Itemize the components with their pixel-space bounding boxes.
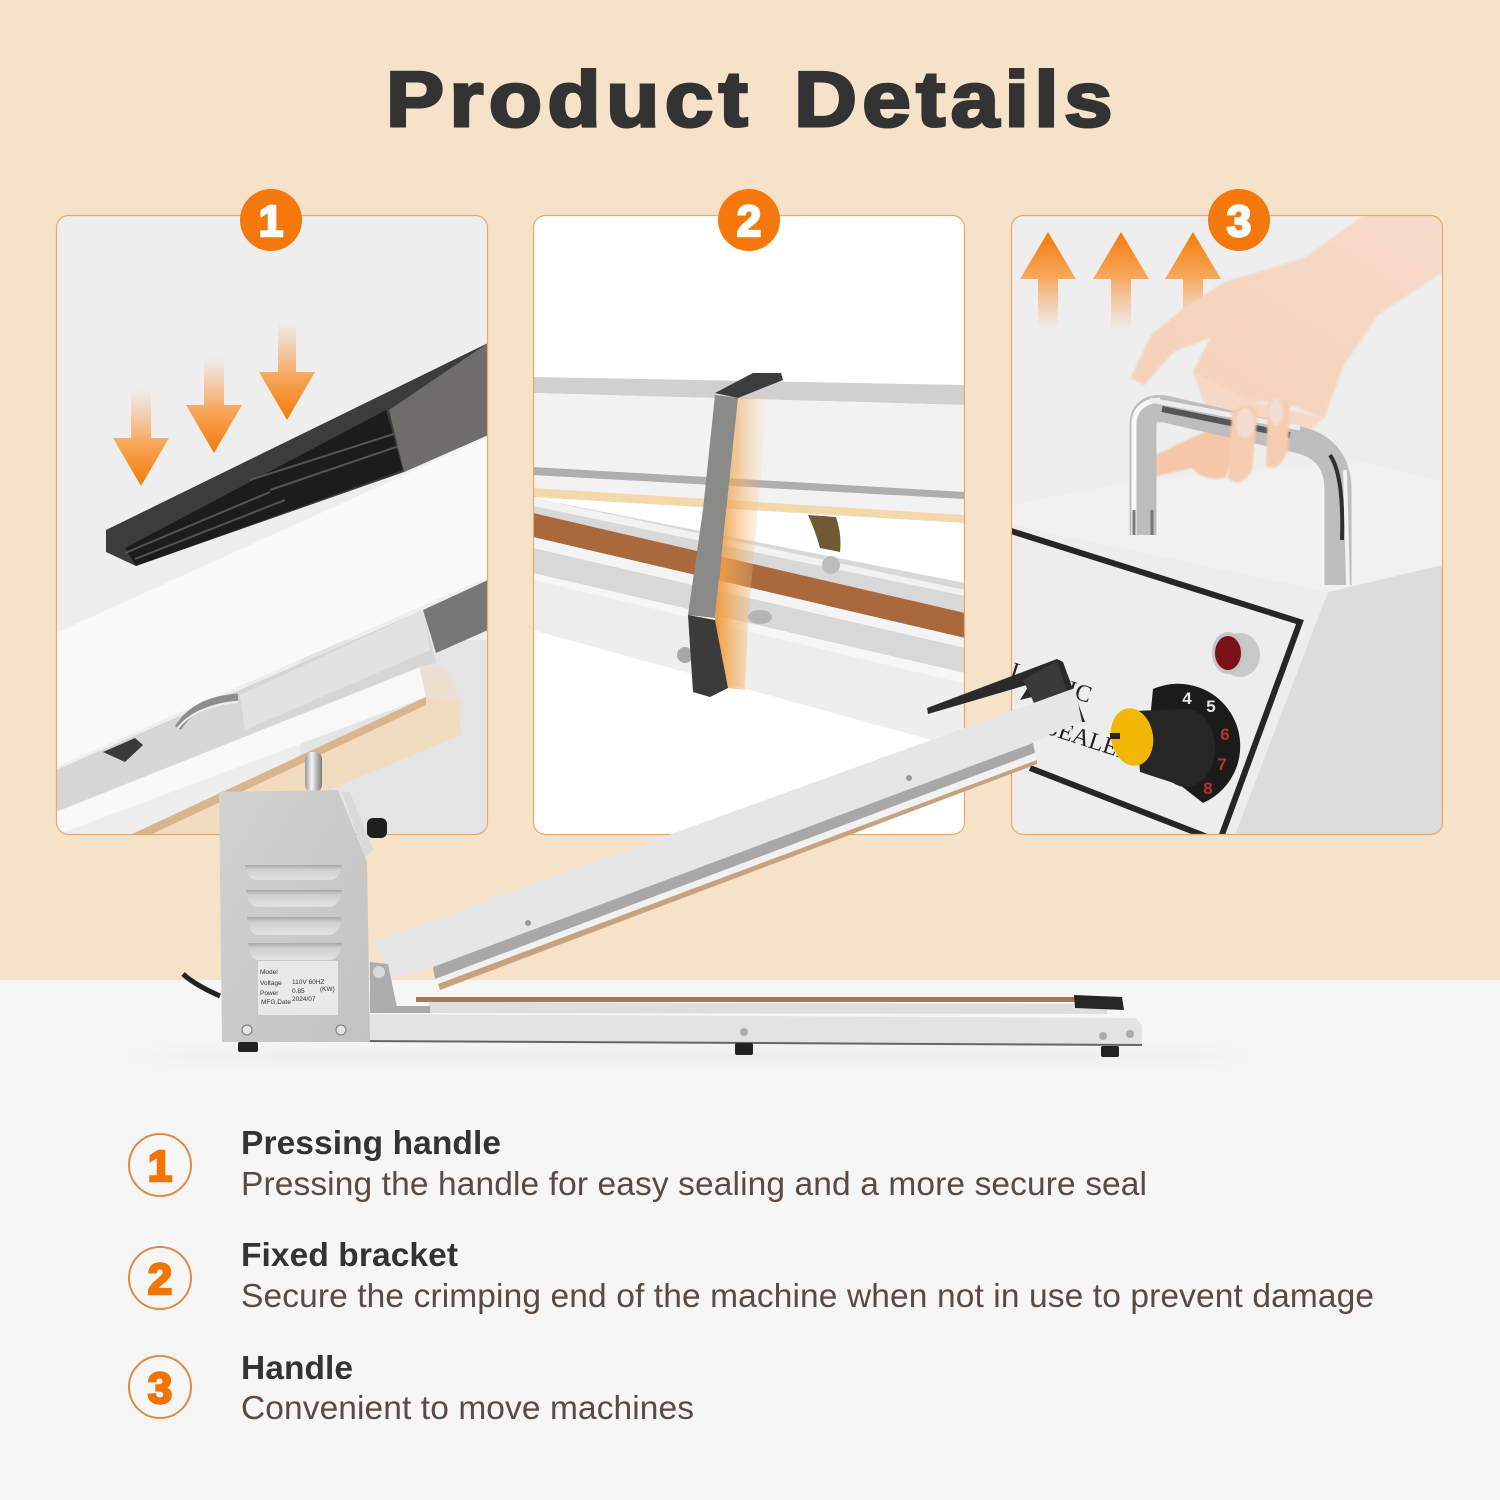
panel 3: carry handle photo: SEALER — [1042, 714, 1136, 767]
dark handle grip — [106, 343, 488, 566]
dial — [1106, 684, 1240, 803]
badge 2: 2 — [737, 197, 761, 246]
body — [219, 790, 370, 1042]
item 2: fixed bracket — [129, 1237, 1374, 1315]
dial: 6 — [1220, 725, 1230, 744]
panel 3: carry handle photo — [994, 215, 1443, 840]
base rail: front — [368, 1014, 1142, 1046]
item 3 description: Convenient to move machines — [241, 1390, 694, 1427]
background: cream upper band — [0, 0, 1500, 980]
black panel frame — [1011, 531, 1300, 840]
rating label: Power — [260, 990, 279, 997]
item 2 number ring — [129, 1247, 191, 1309]
dial: 5 — [1206, 697, 1216, 716]
panel lettering: PLASTIC — [994, 654, 1095, 709]
rating label: 2024/07 — [292, 996, 316, 1003]
item 2 number ring: 2 — [148, 1255, 172, 1304]
panel 2 border — [534, 216, 964, 834]
base rail: seal strip — [416, 997, 1081, 1002]
ring fastener — [178, 697, 238, 728]
dial: 4 — [1182, 689, 1192, 708]
rating label: 0.85 — [292, 988, 305, 995]
side knob — [367, 818, 387, 838]
hand: fingers over handle — [1228, 399, 1290, 482]
lower rail — [533, 498, 965, 750]
arrows pointing down — [113, 322, 315, 486]
rating label: Model — [260, 969, 278, 976]
rating label — [258, 961, 338, 1015]
item 2 heading: Fixed bracket — [241, 1237, 458, 1274]
item 1 number ring — [129, 1134, 191, 1196]
badge 3: 3 — [1227, 197, 1251, 246]
strap behind rail — [808, 515, 840, 552]
chrome handle — [1134, 400, 1348, 585]
sealer machine — [130, 659, 1250, 1065]
base rail: upper channel — [429, 1002, 1107, 1014]
upper arm face — [373, 688, 1082, 978]
badge 1: 1 — [259, 197, 283, 246]
hinge — [370, 962, 397, 1012]
upper arm channel — [433, 743, 1037, 990]
feet — [238, 1042, 258, 1052]
screws — [822, 556, 840, 574]
title: Product Details — [386, 55, 1118, 143]
background: light grey lower band — [0, 980, 1500, 1500]
panel 1 border — [56, 216, 488, 834]
rating label: (KW) — [320, 986, 335, 993]
item 3 number ring: 3 — [148, 1364, 172, 1413]
item 3: handle — [129, 1350, 694, 1427]
ground shadow — [130, 1047, 1250, 1065]
arm end cap — [927, 659, 1085, 722]
dark block behind the rail — [423, 580, 488, 653]
side control plate — [342, 792, 373, 857]
panel 1: pressing handle photo — [56, 215, 488, 835]
black bracket — [688, 373, 783, 697]
item 1 number ring: 1 — [148, 1142, 172, 1191]
upper rail — [533, 377, 965, 405]
badge 2 — [718, 189, 780, 251]
rating label: 110V 60HZ — [292, 979, 324, 986]
machine side — [1235, 565, 1443, 835]
orange glow — [715, 396, 768, 690]
badge 1 — [240, 189, 302, 251]
hand: arm and palm — [1131, 215, 1443, 479]
knob body — [1172, 709, 1215, 787]
rating label: MFG.Date — [261, 999, 291, 1006]
item 3 heading: Handle — [241, 1350, 353, 1387]
base latch — [1074, 995, 1124, 1010]
item 1 heading: Pressing handle — [241, 1125, 501, 1162]
body screws — [242, 1025, 252, 1035]
aluminium channel — [56, 610, 464, 835]
panel 3 border — [1012, 216, 1442, 834]
item 2 description: Secure the crimping end of the machine when not in use to prevent damage — [241, 1278, 1374, 1315]
carry handle — [305, 752, 322, 792]
dial: 8 — [1203, 779, 1213, 798]
item 3 number ring — [129, 1356, 191, 1418]
rating label: Voltage — [260, 980, 282, 987]
power cord — [183, 974, 220, 996]
panel 2: fixed bracket photo — [533, 215, 965, 835]
machine body top — [1011, 462, 1443, 592]
badge 3 — [1208, 189, 1270, 251]
arrows pointing up — [1020, 232, 1221, 330]
vents — [245, 865, 342, 960]
white arm face — [56, 437, 488, 767]
dial: 7 — [1217, 755, 1227, 774]
machine face — [1011, 525, 1328, 835]
yellow cap — [1110, 708, 1154, 766]
item 1 description: Pressing the handle for easy sealing and a more secure seal — [241, 1166, 1147, 1203]
red lamp — [1212, 632, 1260, 677]
item 1: pressing handle — [129, 1125, 1147, 1203]
